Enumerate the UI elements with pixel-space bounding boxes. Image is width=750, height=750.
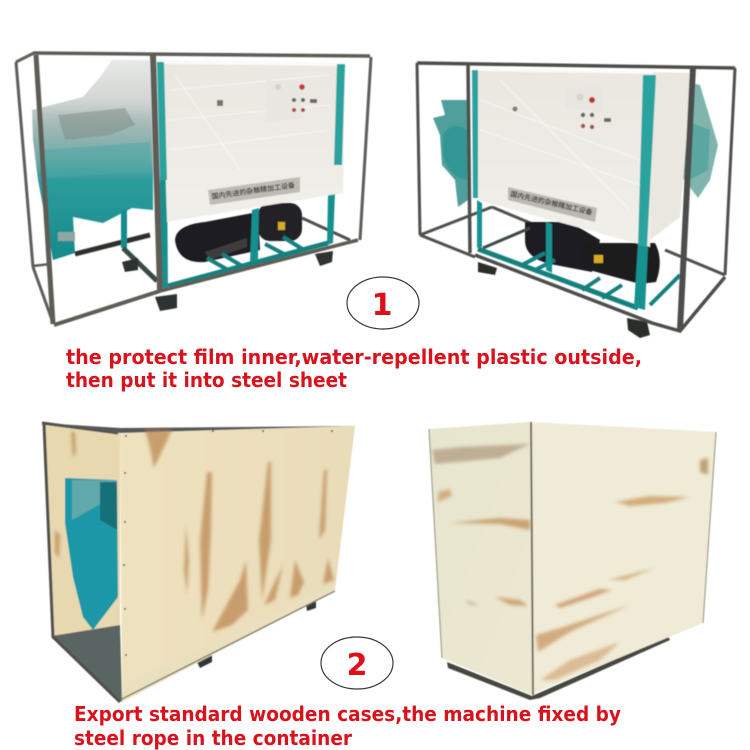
photo: closed wooden crate bbox=[429, 422, 716, 700]
white panel bbox=[162, 60, 345, 222]
machine name plate: 国内先进的杂粮精加工设备 bbox=[211, 180, 295, 201]
crate front face bbox=[120, 426, 355, 702]
caption: step 1: then put it into steel sheet bbox=[66, 368, 347, 392]
machine name plate bbox=[508, 187, 597, 222]
back steel frame bbox=[417, 63, 735, 275]
machine name plate bbox=[208, 177, 300, 205]
feet bbox=[122, 251, 333, 311]
badge: step 1 bbox=[347, 277, 419, 329]
crate feet bbox=[195, 600, 316, 668]
teal posts bbox=[477, 200, 648, 310]
motors bbox=[525, 222, 660, 284]
caption: step 1: the protect film inner,water-repellent plastic outside, bbox=[66, 345, 642, 369]
crate corner edge bbox=[531, 422, 533, 695]
photo: wrapped machine in steel frame, left view bbox=[16, 53, 371, 325]
caption: step 1 bbox=[66, 345, 642, 392]
crate nails bbox=[123, 430, 333, 656]
crate left face bbox=[429, 422, 532, 695]
slatted base bbox=[207, 237, 304, 270]
teal strips bbox=[157, 62, 345, 180]
crate interior floor bbox=[52, 625, 122, 702]
caption: step 2: steel rope in the container bbox=[74, 726, 352, 750]
wood stains bbox=[432, 444, 708, 680]
control buttons bbox=[512, 86, 611, 129]
front steel frame bbox=[417, 63, 735, 331]
crate right face bbox=[531, 422, 716, 695]
dark under-frame rail bbox=[75, 235, 150, 254]
feet bbox=[478, 262, 650, 338]
crate frame edges bbox=[42, 423, 120, 702]
white panel front bbox=[472, 68, 653, 247]
badge: step 2: 2 bbox=[347, 648, 367, 683]
teal strips bbox=[472, 70, 656, 247]
motors bbox=[175, 203, 302, 262]
caption: step 2: Export standard wooden cases,the machine fixed by bbox=[74, 702, 621, 726]
left machine blob bbox=[433, 100, 468, 207]
film streaks bbox=[480, 80, 640, 210]
machine hopper bbox=[32, 60, 153, 260]
machine inside bbox=[65, 478, 118, 630]
teal posts bbox=[157, 173, 335, 288]
back steel frame bbox=[16, 53, 371, 320]
caption: step 2 bbox=[74, 702, 621, 750]
crate bottom batten bbox=[122, 583, 336, 702]
white panel side bbox=[650, 72, 692, 240]
badge: step 1: 1 bbox=[372, 288, 392, 323]
badge: step 2 bbox=[321, 637, 393, 689]
film streaks bbox=[168, 75, 330, 170]
photo: open wooden crate bbox=[42, 423, 355, 702]
right machine blob bbox=[665, 80, 718, 198]
crate interior back wall bbox=[44, 424, 120, 636]
wood stains bbox=[55, 430, 334, 632]
front steel frame bbox=[33, 53, 370, 325]
crate base shadow bbox=[447, 636, 670, 700]
photo: wrapped machine in steel frame, right view bbox=[417, 63, 735, 338]
control buttons bbox=[217, 80, 317, 122]
machine name plate: 国内先进的杂粮精加工设备 bbox=[510, 189, 593, 217]
slatted base bbox=[478, 228, 680, 308]
